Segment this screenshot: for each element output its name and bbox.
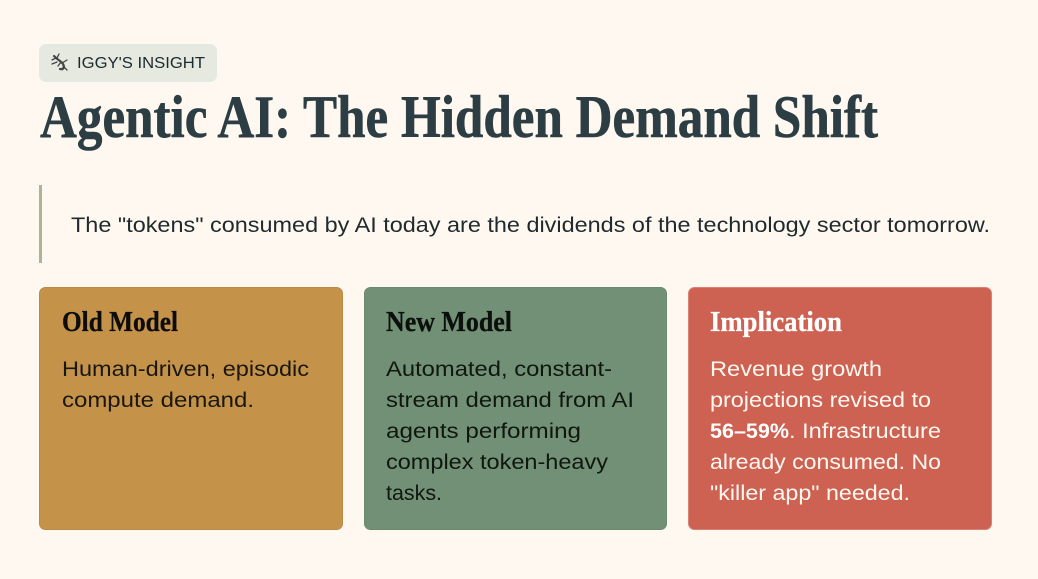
title: Agentic AI: The Hidden Demand Shift — [40, 84, 878, 150]
text: new model description: complex token-heavy — [386, 450, 608, 474]
quote callout — [39, 185, 990, 263]
badge: Iggy's Insight: IGGY'S INSIGHT — [77, 55, 205, 72]
heading: implication: Implication — [710, 307, 842, 338]
text: implication description: 56–59% — [710, 419, 789, 443]
panel: new model — [364, 288, 666, 530]
panel: old model — [40, 288, 342, 530]
text: implication description: Revenue growth — [710, 357, 882, 381]
badge: Iggy's Insight — [39, 44, 217, 82]
quote callout: The "tokens" consumed by AI today are the dividends of the technology sector tomorrow. — [71, 214, 990, 237]
text: new model description — [386, 357, 634, 505]
text: implication description: already consumed. No — [710, 450, 941, 474]
text: old model description: compute demand. — [62, 388, 254, 412]
text: implication description — [710, 357, 941, 505]
text: implication description: . Infrastructure — [789, 419, 941, 443]
text: implication description: "killer app" needed. — [710, 481, 910, 505]
heading: old model: Old Model — [62, 307, 178, 338]
text: old model description — [62, 357, 309, 412]
text: new model description: tasks. — [386, 481, 442, 505]
text: new model description: agents performing — [386, 419, 581, 443]
panel: implication — [688, 288, 992, 530]
text: old model description: Human-driven, episodic — [62, 357, 309, 381]
text: implication description: projections revised to — [710, 388, 931, 412]
text: new model description: Automated, constant- — [386, 357, 612, 381]
text: new model description: stream demand from AI — [386, 388, 634, 412]
icon: lizard — [52, 54, 67, 70]
heading: new model: New Model — [386, 307, 512, 338]
